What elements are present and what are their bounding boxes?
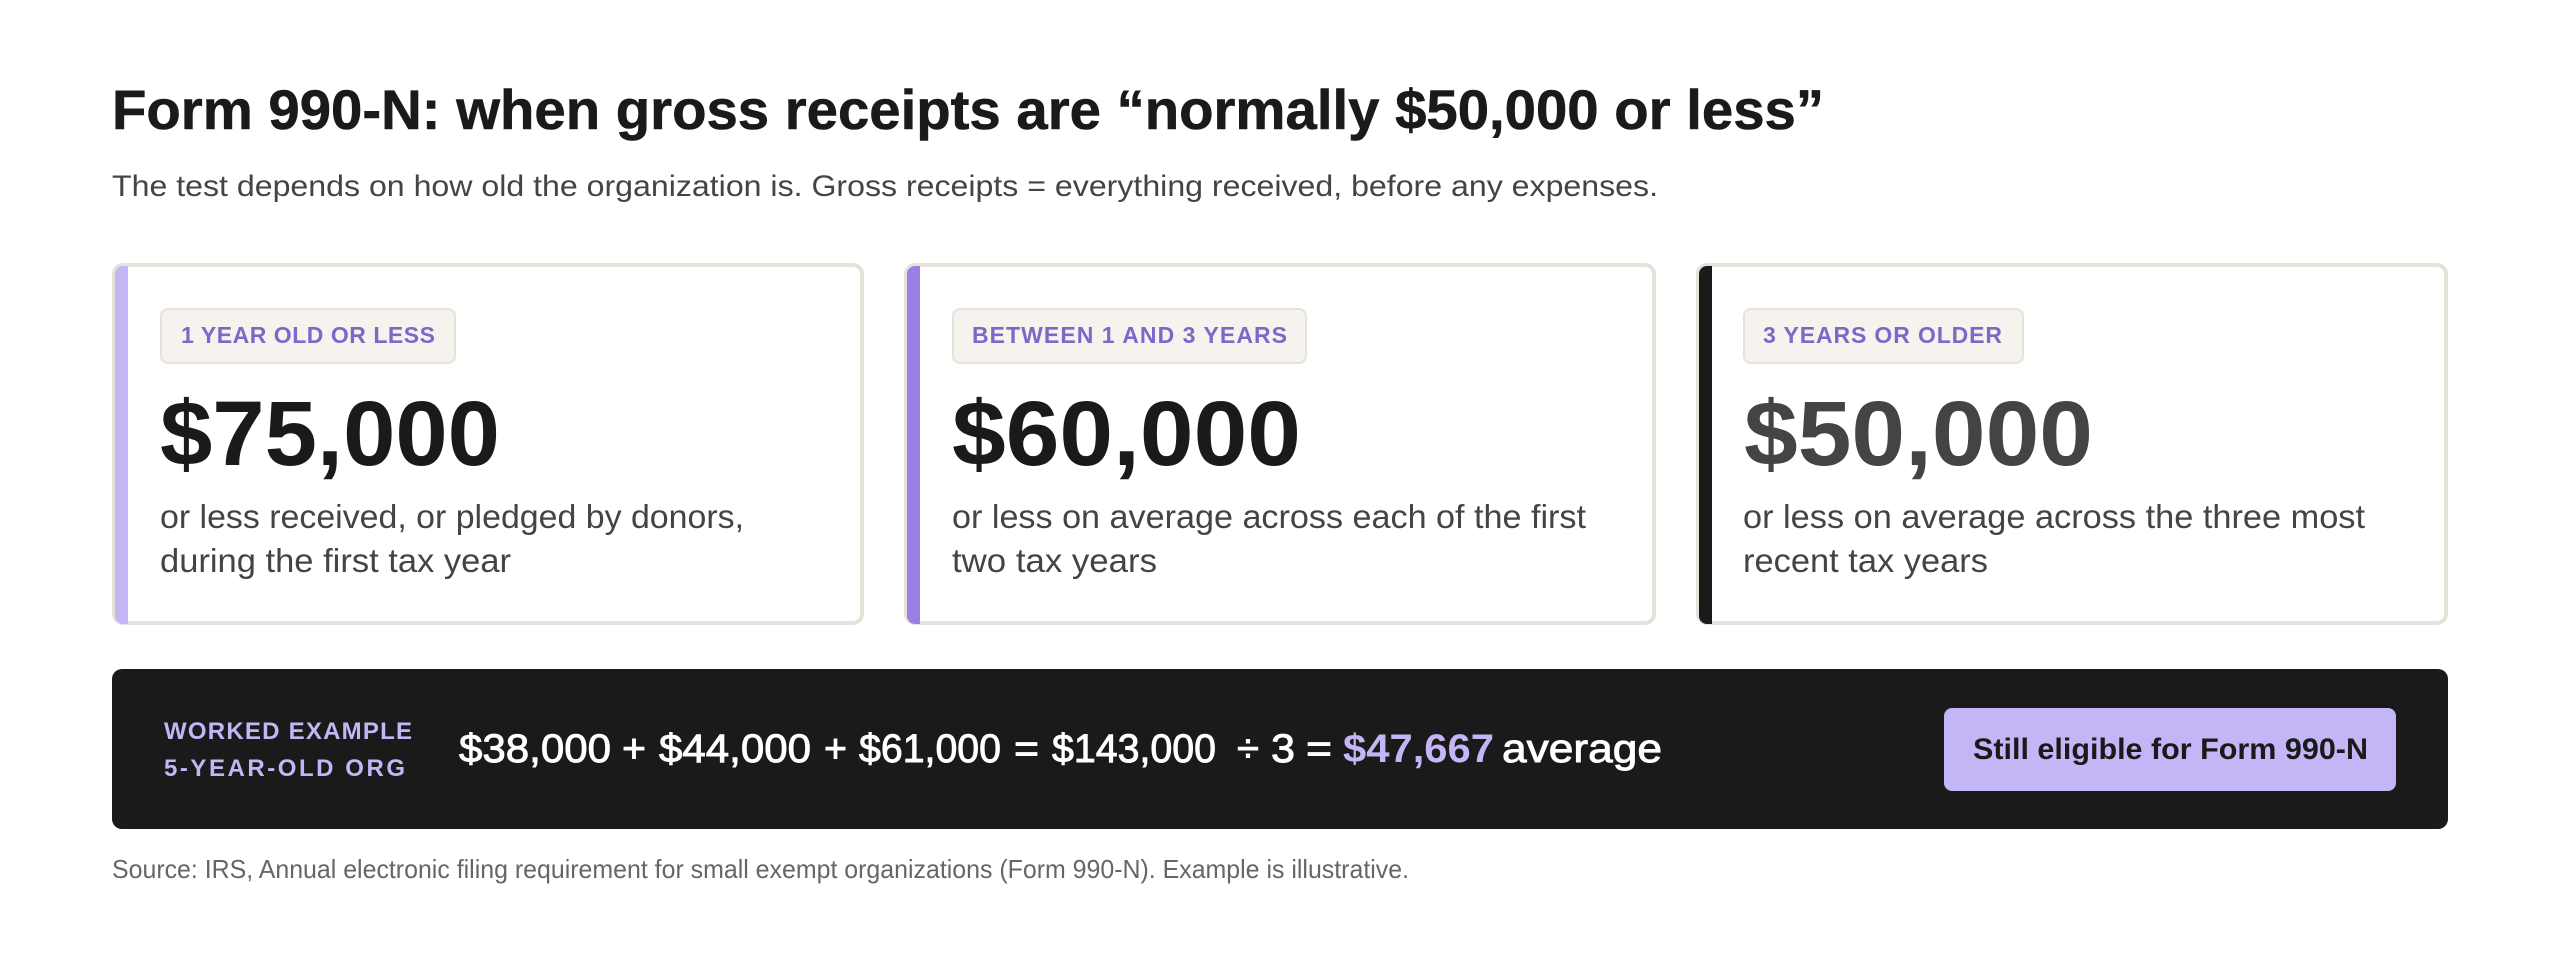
- card 3 amount: $50,000: [1744, 383, 2093, 485]
- eligibility button: [1944, 708, 2396, 791]
- card 1 accent bar: [115, 266, 128, 624]
- worked example bar: [112, 669, 2448, 829]
- equation: +: [622, 727, 646, 771]
- card 1 frame: [114, 265, 862, 623]
- equation: $38,000: [459, 727, 611, 771]
- card 1 amount: $75,000: [160, 383, 500, 485]
- panel: 3 years or older: [1698, 265, 2446, 624]
- subtitle: The test depends on how old the organization is. Gross receipts = everything received, before any expenses.: [112, 170, 1658, 203]
- card 3 age badge: [1744, 309, 2023, 363]
- title: Form 990-N: when gross receipts are “normally $50,000 or less”: [112, 78, 1824, 141]
- equation: 3: [1271, 727, 1295, 771]
- card 2 description: two tax years: [952, 542, 1157, 579]
- card 1 description: or less received, or pledged by donors,: [160, 498, 744, 535]
- card 2 accent bar: [907, 266, 920, 624]
- card 2 frame: [906, 265, 1654, 623]
- card 2 age badge: [953, 309, 1306, 363]
- card 1 description: during the first tax year: [160, 542, 511, 579]
- card 3 description: or less on average across the three most: [1743, 498, 2365, 535]
- worked example label: [164, 718, 412, 782]
- card 2 age badge: BETWEEN 1 AND 3 YEARS: [972, 322, 1287, 348]
- worked example label: WORKED EXAMPLE: [164, 718, 412, 745]
- equation: =: [1306, 727, 1332, 771]
- worked example label: 5-YEAR-OLD ORG: [164, 755, 405, 782]
- bar background: [112, 669, 2448, 829]
- card 3 age badge: 3 YEARS OR OLDER: [1763, 322, 2002, 348]
- card 3 description: recent tax years: [1743, 542, 1988, 579]
- panel: between 1 and 3 years: [906, 265, 1654, 624]
- panel: 1 year old or less: [114, 265, 862, 624]
- equation: $47,667: [1343, 727, 1494, 771]
- equation: =: [1014, 727, 1039, 771]
- card 2 amount: $60,000: [952, 383, 1301, 485]
- card 1 age badge: 1 YEAR OLD OR LESS: [181, 322, 435, 348]
- card 2 description: or less on average across each of the first: [952, 498, 1586, 535]
- equation: $143,000: [1052, 727, 1216, 771]
- equation: $44,000: [659, 727, 811, 771]
- source note: Source: IRS, Annual electronic filing requirement for small exempt organizations (Form 990-N). Example is illustrative.: [112, 854, 1409, 884]
- equation: $61,000: [859, 727, 1001, 771]
- equation: +: [824, 727, 847, 771]
- card 3 description: [1743, 498, 2365, 579]
- equation: ÷: [1237, 727, 1259, 771]
- equation: average: [1502, 727, 1662, 771]
- card 2 description: [952, 498, 1586, 579]
- card 3 frame: [1698, 265, 2446, 623]
- card 1 description: [160, 498, 744, 579]
- equation: [459, 727, 1662, 771]
- card 1 age badge: [161, 309, 455, 363]
- card 3 accent bar: [1699, 266, 1712, 624]
- eligibility button: Still eligible for Form 990-N: [1973, 733, 2368, 766]
